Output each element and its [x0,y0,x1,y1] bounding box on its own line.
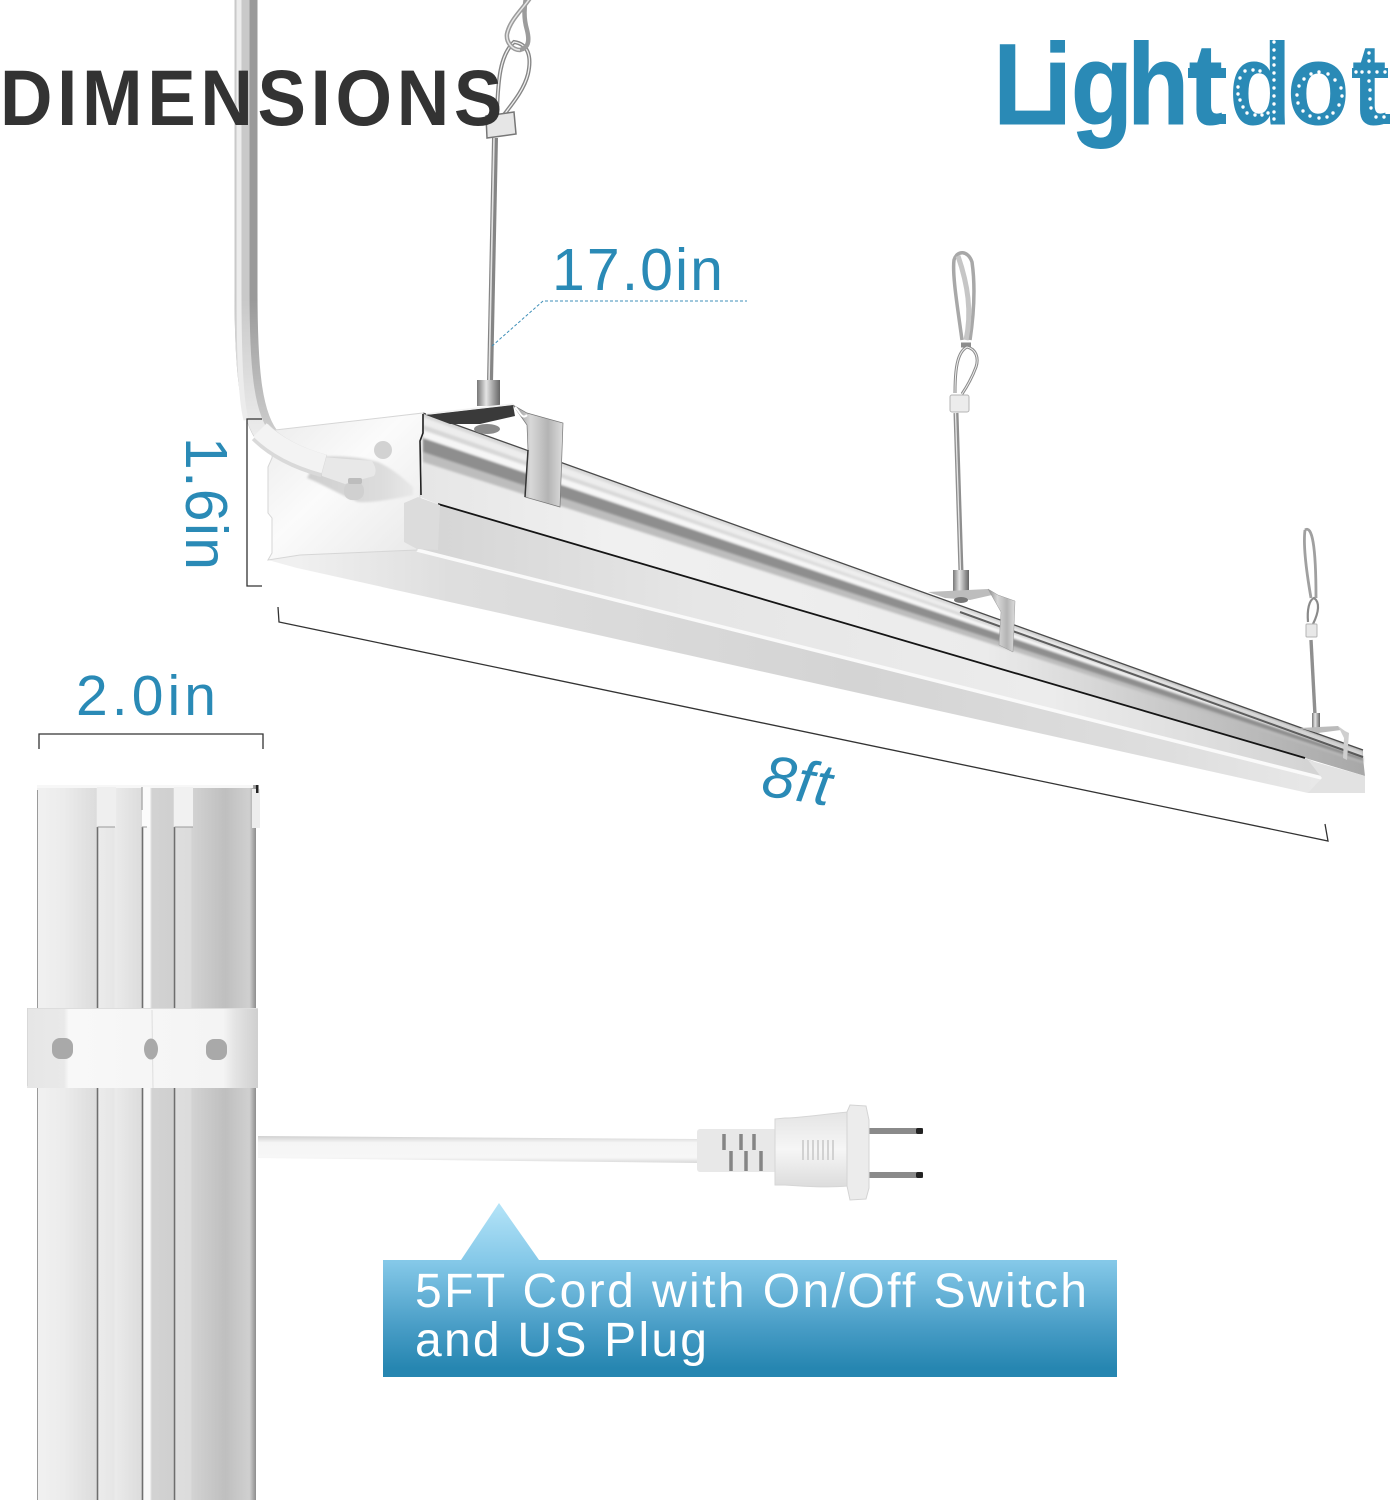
mounting clip [426,404,563,507]
plug body [775,1112,848,1187]
cut edge of rail [420,414,423,495]
top end cap pieces [37,785,253,827]
strain relief [697,1129,777,1172]
switch recess shadow [307,456,413,502]
hanger 2: wire and clip [950,253,977,591]
prongs [868,1128,923,1178]
front view of fixture [27,785,260,1500]
cap corner block [404,497,440,550]
dimension: 1.6in label: 1.6in [173,437,239,570]
right edge tab [252,785,260,828]
channel lines [98,787,193,1500]
callout text: 5FT Cord with On/Off Switch [415,1265,1087,1318]
callout: cord and plug note [383,1203,1117,1377]
title: DIMENSIONS [0,54,502,143]
seam line [438,504,1305,758]
grip ridges [803,1140,833,1160]
power cord horizontal [258,1136,698,1163]
diffuser panel [417,505,1345,778]
fixture: LED shop light body [260,404,1365,793]
plug flange [847,1105,869,1200]
cord entry [260,430,324,466]
power switch [322,457,376,500]
white highlight stripe [417,550,1322,778]
rail shading bands [423,417,1363,763]
logo: Lightdot [994,20,1390,148]
bracket 2 [928,589,1015,652]
hanger 1: wire and clip [477,0,530,406]
callout: cord and plug note: and US Plug [415,1314,707,1367]
dimension: 8ft bracket [278,607,1328,841]
mounting clamp [27,1008,258,1088]
hanger 3: wire and clip [1304,529,1320,728]
bracket 3 [1300,726,1349,760]
dimension: 8ft label: 8ft [758,743,839,819]
lower housing band [268,549,1365,793]
upper metal rail [423,413,1363,760]
rail side face [420,459,1365,776]
US plug [697,1105,923,1200]
dimension: 2.0in label: 2.0in [76,664,216,728]
logo wordmark: Lightdot [994,20,1386,148]
far end cap [1308,760,1365,793]
near end cap [268,413,423,560]
vertical body [37,785,256,1500]
dark top edge line [423,413,1363,750]
dimension: 17.0in leader line [492,301,747,346]
mounting button [374,441,392,459]
dimension: 2.0in bracket [39,734,263,749]
hanging power cord [239,0,272,442]
body left edge [36,790,38,1500]
clamp hole right [206,1039,227,1060]
logo light dots [1236,40,1387,121]
dimension: 17.0in label: 17.0in [552,237,723,303]
logo letter t extensions [1188,68,1390,124]
clamp hole left [52,1038,73,1059]
callout box with pointer [383,1203,1117,1377]
dimension: 1.6in bracket [247,419,262,586]
clamp hole center [144,1038,158,1060]
